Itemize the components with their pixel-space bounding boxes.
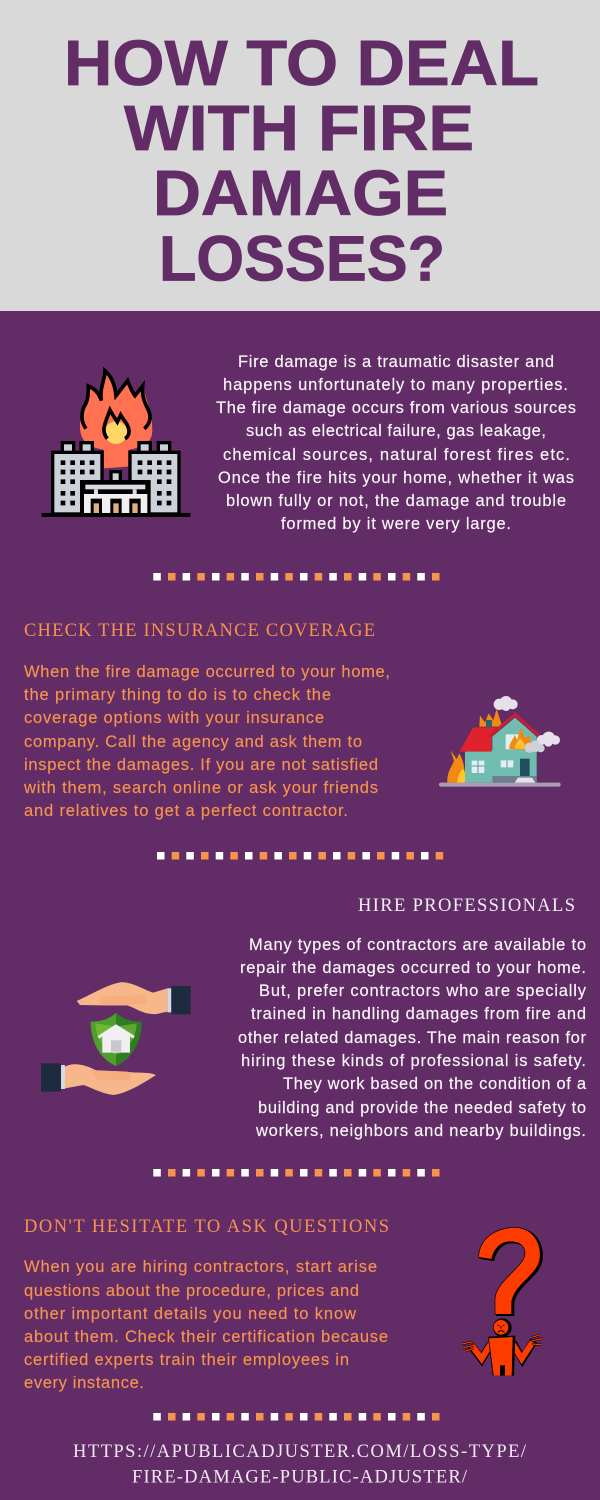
body: insurance coverage: When the fire damage occurred to your home, <box>24 663 390 681</box>
body: ask questions: When you are hiring contractors, start arise <box>24 1258 377 1276</box>
intro text: formed by it were very large. <box>281 515 511 533</box>
heading: check the insurance coverage: CHECK THE INSURANCE COVERAGE <box>24 621 375 641</box>
body: ask questions <box>24 1258 388 1392</box>
body: hire professionals: But, prefer contractors who are specially <box>259 982 587 1000</box>
title banner <box>0 0 600 311</box>
body: hire professionals: workers, neighbors and nearby buildings. <box>255 1122 586 1140</box>
title: DAMAGE <box>153 157 448 229</box>
heading: don't hesitate to ask questions: DON'T HESITATE TO ASK QUESTIONS <box>24 1217 389 1237</box>
intro text: blown fully or not, the damage and trouble <box>226 492 566 510</box>
body: insurance coverage: company. Call the agency and ask them to <box>24 733 362 751</box>
body: ask questions: about them. Check their certification because <box>24 1328 388 1346</box>
body: hire professionals: other related damages. The main reason for <box>238 1029 586 1047</box>
footer url: FIRE-DAMAGE-PUBLIC-ADJUSTER/ <box>132 1468 468 1488</box>
intro text: such as electrical failure, gas leakage, <box>246 422 546 440</box>
body: hire professionals: repair the damages occurred to your home. <box>240 959 586 977</box>
body: ask questions: every instance. <box>24 1374 144 1392</box>
body: insurance coverage: inspect the damages. If you are not satisfied <box>24 756 378 774</box>
body: insurance coverage: coverage options with your insurance <box>24 709 324 727</box>
body: hire professionals: building and provide the needed safety to <box>258 1099 586 1117</box>
body: hire professionals: hiring these kinds of professional is safety. <box>241 1052 586 1070</box>
intro text <box>216 353 576 533</box>
body: insurance coverage: and relatives to get a perfect contractor. <box>24 802 348 820</box>
footer url: HTTPS://APUBLICADJUSTER.COM/LOSS-TYPE/ <box>73 1442 527 1462</box>
body: ask questions: other important details you need to know <box>24 1305 356 1323</box>
icon: house on fire <box>439 696 561 787</box>
body: hire professionals: They work based on the condition of a <box>283 1075 587 1093</box>
intro text: Fire damage is a traumatic disaster and <box>238 353 554 371</box>
body: ask questions: questions about the procedure, prices and <box>24 1282 359 1300</box>
intro text: happens unfortunately to many properties. <box>223 376 568 394</box>
body: insurance coverage: with them, search online or ask your friends <box>23 779 378 797</box>
heading: hire professionals: HIRE PROFESSIONALS <box>358 896 575 916</box>
intro text: chemical sources, natural forest fires etc. <box>223 446 570 464</box>
body: hire professionals <box>238 936 587 1140</box>
title: HOW TO DEAL <box>64 27 539 99</box>
body: insurance coverage: the primary thing to do is to check the <box>24 686 331 704</box>
intro text: The fire damage occurs from various sources <box>216 399 576 417</box>
title: WITH FIRE <box>124 92 474 164</box>
icon: burning buildings <box>42 371 190 517</box>
icon: hands protecting house shield <box>41 982 191 1095</box>
icon: question mark person <box>462 1227 543 1376</box>
intro text: Once the fire hits your home, whether it was <box>218 469 574 487</box>
body: hire professionals: trained in handling damages from fire and <box>251 1005 586 1023</box>
footer url <box>73 1442 527 1488</box>
body: hire professionals: Many types of contractors are available to <box>249 936 586 954</box>
title <box>64 27 539 294</box>
title: LOSSES? <box>159 222 445 294</box>
body: insurance coverage <box>23 663 390 820</box>
body: ask questions: certified experts train their employees in <box>24 1351 349 1369</box>
